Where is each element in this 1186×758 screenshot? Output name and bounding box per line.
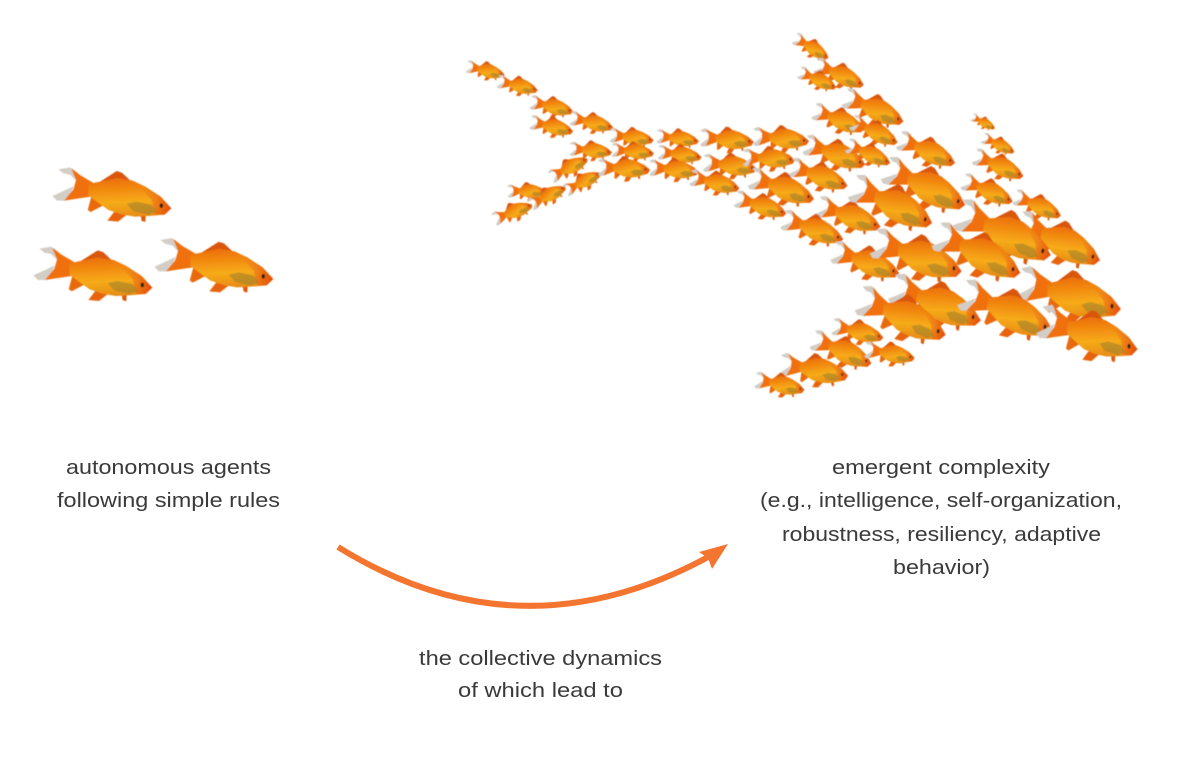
text: emergent complexity caption: (e.g., intelligence, self-organization, bbox=[760, 490, 1122, 512]
tail of school bbox=[465, 59, 613, 233]
icon: three goldfish bbox=[33, 167, 273, 301]
main body of school bbox=[733, 134, 1139, 363]
text: collective dynamics caption: the collective dynamics bbox=[419, 648, 662, 670]
arrow: curved orange arrow bbox=[338, 544, 728, 606]
lower fin of school bbox=[753, 316, 915, 399]
panel: autonomous agents bbox=[33, 167, 273, 301]
illustration: school of goldfish forming one large fish bbox=[465, 32, 1139, 399]
text: collective dynamics caption bbox=[419, 648, 662, 702]
text: emergent complexity caption: emergent complexity bbox=[832, 457, 1050, 479]
text: autonomous agents caption bbox=[57, 457, 280, 512]
text: autonomous agents caption: following simple rules bbox=[57, 490, 280, 512]
mid body of school bbox=[567, 119, 810, 197]
text: collective dynamics caption: of which lead to bbox=[458, 680, 623, 702]
text: emergent complexity caption bbox=[760, 457, 1122, 579]
text: emergent complexity caption: behavior) bbox=[893, 557, 990, 579]
text: autonomous agents caption: autonomous agents bbox=[66, 457, 271, 479]
upper fin of school bbox=[789, 32, 1064, 222]
text: emergent complexity caption: robustness, resiliency, adaptive bbox=[782, 524, 1101, 546]
